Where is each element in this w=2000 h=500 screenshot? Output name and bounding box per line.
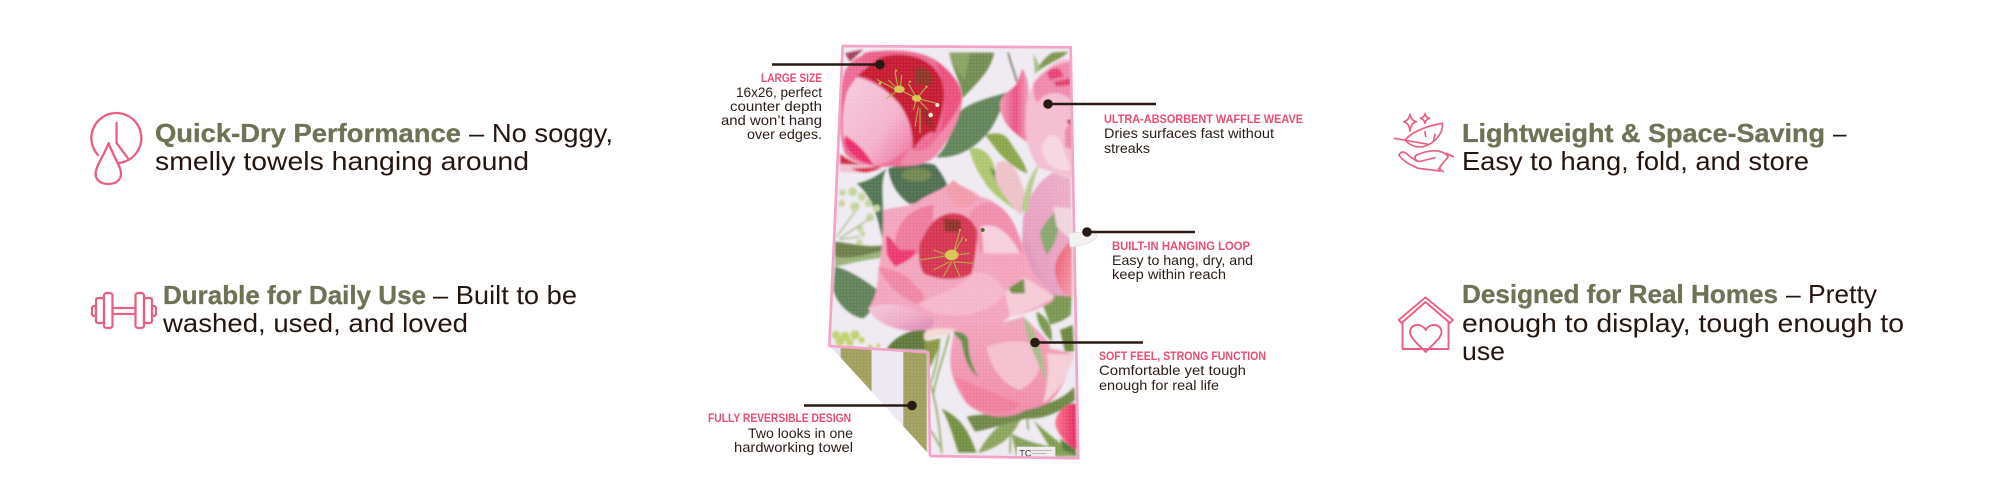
- callout: large size: over edges.: [747, 126, 822, 142]
- heading: durable for daily use: – Built to be: [433, 280, 577, 310]
- icon: clock and water drop: [91, 113, 141, 184]
- benefit: designed for real homes: [1399, 279, 1904, 366]
- panel: left benefits: [91, 113, 613, 338]
- callout: soft feel, strong function: SOFT FEEL, STRONG FUNCTION: [1099, 349, 1266, 363]
- heading: lightweight and space-saving: [1462, 118, 1847, 176]
- heading: durable for daily use: Durable for Daily Use: [163, 280, 426, 310]
- heading: designed for real homes: Designed for Real Homes: [1462, 279, 1778, 309]
- callout: built-in hanging loop: BUILT-IN HANGING LOOP: [1112, 239, 1250, 253]
- callout: ultra-absorbent waffle weave: ULTRA-ABSORBENT WAFFLE WEAVE: [1104, 112, 1303, 126]
- callout: built-in hanging loop: keep within reach: [1112, 266, 1226, 282]
- callout: large size: 16x26, perfect: [736, 84, 822, 100]
- callout: large size: and won’t hang: [721, 112, 822, 128]
- heading: designed for real homes: [1462, 279, 1904, 366]
- heading: lightweight and space-saving: Lightweight & Space-Saving: [1462, 118, 1825, 148]
- callout: large size: LARGE SIZE: [761, 71, 822, 85]
- label tag: TC: [1019, 449, 1032, 459]
- callout: ultra-absorbent waffle weave: Dries surfaces fast without: [1104, 125, 1274, 141]
- callout: fully reversible design: Two looks in one: [748, 425, 853, 441]
- heading: durable for daily use: washed, used, and loved: [162, 308, 468, 338]
- hanging loop: [1069, 231, 1097, 247]
- heading: quick-dry performance: smelly towels hanging around: [155, 146, 529, 176]
- panel: right benefits: [1394, 114, 1904, 366]
- callout: built-in hanging loop: [1082, 227, 1253, 282]
- heading: designed for real homes: enough to display, tough enough to: [1462, 308, 1904, 338]
- callout: soft feel, strong function: Comfortable yet tough: [1099, 362, 1246, 378]
- icon: feather over hand with sparkles: [1394, 114, 1453, 172]
- panel: towel illustration: [820, 40, 1097, 463]
- benefit: quick-dry performance: [91, 113, 613, 184]
- icon: dumbbell: [92, 293, 156, 328]
- towel artwork: [820, 40, 1090, 463]
- icon: house with heart: [1399, 297, 1453, 352]
- callout: ultra-absorbent waffle weave: [1043, 99, 1303, 156]
- benefit: lightweight and space-saving: [1394, 114, 1847, 176]
- callout: ultra-absorbent waffle weave: streaks: [1104, 140, 1150, 156]
- heading: quick-dry performance: Quick-Dry Performance: [155, 118, 461, 148]
- callout: fully reversible design: hardworking towel: [734, 439, 853, 455]
- callout: soft feel, strong function: enough for real life: [1099, 377, 1219, 393]
- heading: designed for real homes: – Pretty: [1786, 279, 1877, 309]
- heading: designed for real homes: use: [1462, 336, 1505, 366]
- callout: fully reversible design: FULLY REVERSIBLE DESIGN: [708, 411, 851, 425]
- heading: quick-dry performance: – No soggy,: [469, 118, 613, 148]
- heading: durable for daily use: [162, 280, 577, 338]
- benefit: durable for daily use: [92, 280, 577, 338]
- heading: quick-dry performance: [155, 118, 613, 176]
- callout: large size: [721, 60, 885, 142]
- callout: soft feel, strong function: [1030, 338, 1266, 393]
- callout: large size: counter depth: [730, 98, 822, 114]
- reverse side fold: [832, 348, 928, 454]
- callout: fully reversible design: [708, 401, 917, 455]
- heading: lightweight and space-saving: Easy to hang, fold, and store: [1462, 146, 1809, 176]
- heading: lightweight and space-saving: –: [1833, 118, 1847, 148]
- label tag: [1016, 446, 1056, 457]
- callout: built-in hanging loop: Easy to hang, dry, and: [1112, 252, 1253, 268]
